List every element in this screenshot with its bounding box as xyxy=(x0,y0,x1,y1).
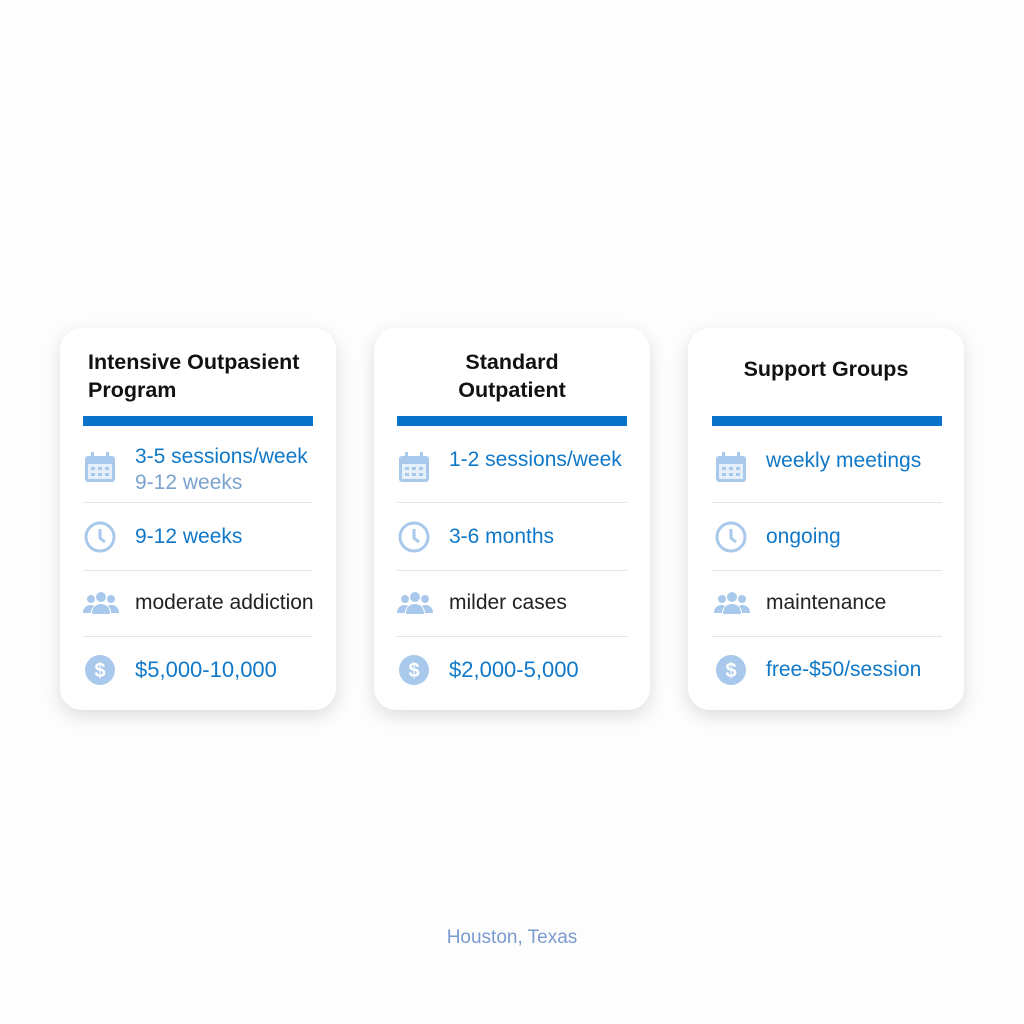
row: cost: $ xyxy=(725,660,737,682)
row: severity: maintenance xyxy=(766,591,886,614)
row: cost: $ xyxy=(408,660,420,682)
row: cost xyxy=(85,655,277,685)
heading: Intensive Outpasient xyxy=(88,350,299,374)
row: sessions xyxy=(85,445,308,494)
card: Intensive Outpatient Program xyxy=(60,328,336,710)
heading: Standard xyxy=(465,350,559,374)
row: duration: ongoing xyxy=(766,525,841,548)
row: sessions: 9-12 weeks xyxy=(135,471,242,494)
heading: Outpatient xyxy=(458,378,566,402)
row: cost xyxy=(399,655,579,685)
row: duration xyxy=(716,522,841,552)
row: cost: $5,000-10,000 xyxy=(135,657,277,682)
row: severity: milder cases xyxy=(449,591,567,614)
row: cost xyxy=(716,655,921,685)
row: cost: free-$50/session xyxy=(766,658,921,681)
heading: Support Groups xyxy=(744,357,908,381)
row: severity xyxy=(714,591,886,614)
row: cost: $ xyxy=(94,660,106,682)
heading xyxy=(88,350,300,402)
row: duration xyxy=(398,522,554,552)
row: duration: 9-12 weeks xyxy=(135,525,242,548)
row: sessions: weekly meetings xyxy=(766,449,921,472)
row: severity xyxy=(397,591,567,614)
row: sessions: 3-5 sessions/week xyxy=(135,445,308,468)
row: sessions xyxy=(399,448,622,482)
heading: Program xyxy=(88,378,176,402)
row: cost: $2,000-5,000 xyxy=(449,657,579,682)
row: sessions xyxy=(716,449,921,482)
card: Support Groups xyxy=(688,328,964,710)
row: sessions: 1-2 sessions/week xyxy=(449,448,622,471)
heading xyxy=(458,350,566,402)
row: severity: moderate addiction xyxy=(135,591,314,614)
card: Standard Outpatient xyxy=(374,328,650,710)
footer location: Houston, Texas xyxy=(447,927,577,948)
row: duration xyxy=(84,522,242,552)
row: duration: 3-6 months xyxy=(449,525,554,548)
